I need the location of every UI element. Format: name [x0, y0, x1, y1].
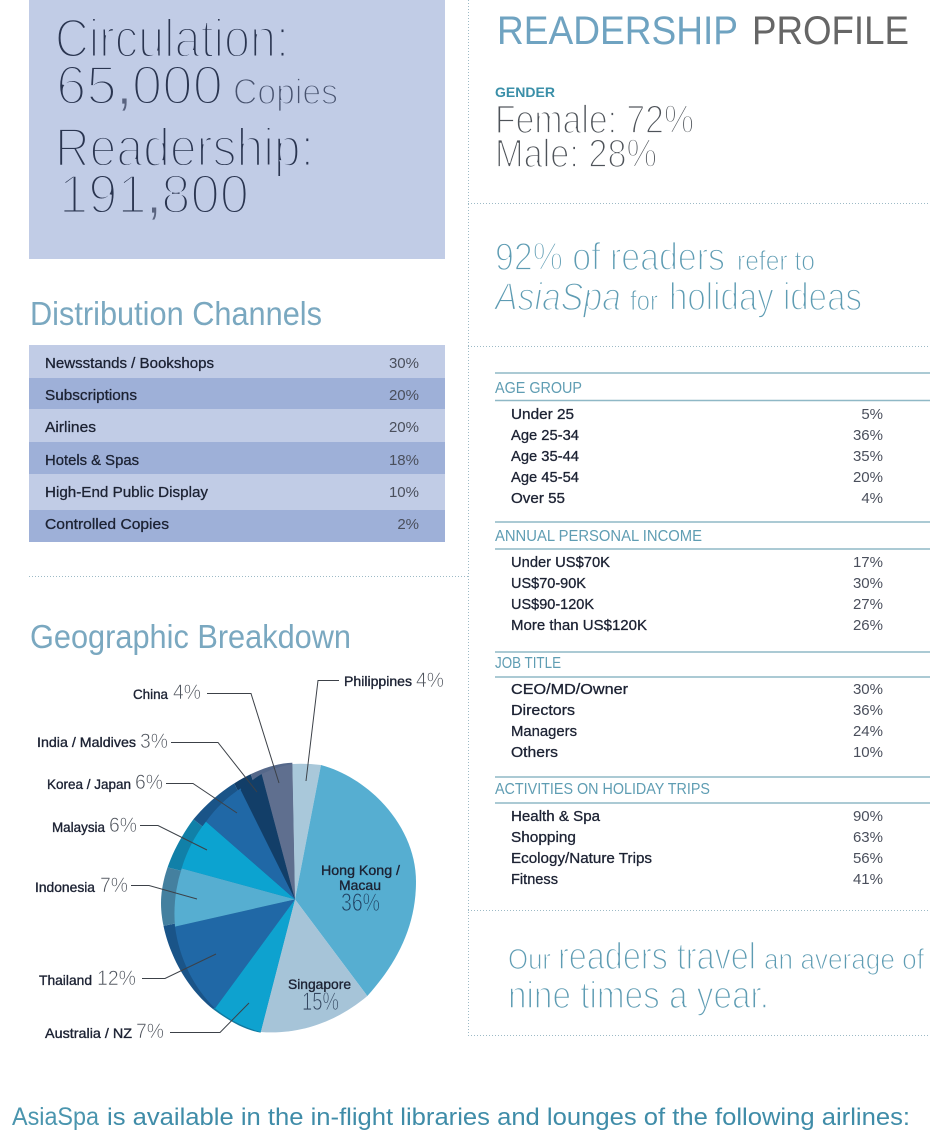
- callout: travel frequency: Our: [508, 944, 551, 976]
- callout: Malaysia: 6%: [109, 814, 137, 837]
- table: annual personal income: 30%: [853, 575, 883, 592]
- callout: China: China: [133, 686, 168, 702]
- table: age group: 36%: [853, 427, 883, 444]
- block: gender: [495, 84, 694, 176]
- heading: readership profile: PROFILE: [752, 9, 909, 53]
- callout: holiday ideas: holiday ideas: [669, 276, 862, 319]
- table: annual personal income: 17%: [853, 554, 883, 571]
- table: activities on holiday trips: [495, 777, 930, 888]
- label: Singapore: 15%: [302, 988, 339, 1016]
- text: readership number: 191,800: [59, 163, 249, 225]
- pie chart: geographic breakdown: [161, 762, 416, 1032]
- callout: Korea / Japan: 6%: [135, 771, 163, 794]
- table: age group: Under 25: [511, 406, 574, 423]
- callout: India / Maldives: India / Maldives: [37, 734, 136, 750]
- footer: airlines statement: is available in the in-flight libraries and lounges of the following airlines:: [107, 1104, 910, 1131]
- table: activities on holiday trips: Fitness: [511, 871, 558, 888]
- table: annual personal income: US$70-90K: [511, 575, 586, 592]
- table: activities on holiday trips: 90%: [853, 808, 883, 825]
- table: age group: [495, 373, 930, 507]
- table: age group: Age 25-34: [511, 427, 579, 444]
- table: distribution channels: Controlled Copies: [45, 516, 169, 533]
- table: activities on holiday trips: 56%: [853, 850, 883, 867]
- callout: Malaysia: Malaysia: [52, 819, 105, 835]
- table: age group: Age 35-44: [511, 448, 579, 465]
- label: Singapore: Singapore: [288, 976, 351, 992]
- callout: holiday ideas: refer to: [737, 245, 815, 276]
- callout: China: [133, 681, 279, 783]
- table: age group: Over 55: [511, 490, 565, 507]
- callout: Malaysia: [52, 814, 207, 850]
- table: age group: 35%: [853, 448, 883, 465]
- callout: holiday ideas: [493, 236, 862, 319]
- label: Singapore: [288, 976, 351, 1016]
- callout: India / Maldives: 3%: [140, 730, 168, 753]
- text: readership label: Readership:: [55, 116, 314, 178]
- callout: Australia / NZ: [45, 1003, 249, 1043]
- table: activities on holiday trips: Ecology/Nature Trips: [511, 850, 652, 867]
- table: job title: JOB TITLE: [495, 655, 561, 672]
- table: distribution channels: 18%: [389, 452, 419, 469]
- block: gender: Female: 72%: [495, 98, 694, 142]
- block: gender: Male: 28%: [495, 132, 657, 176]
- table: distribution channels: [29, 345, 445, 542]
- table: job title: 24%: [853, 723, 883, 740]
- callout: holiday ideas: AsiaSpa: [493, 276, 621, 319]
- table: job title: 36%: [853, 702, 883, 719]
- label: Hong Kong / Macau: Hong Kong /: [321, 862, 400, 878]
- table: age group: AGE GROUP: [495, 380, 582, 397]
- table: distribution channels: 2%: [397, 516, 419, 533]
- table: distribution channels: Newsstands / Bookshops: [45, 355, 214, 372]
- callout: Australia / NZ: 7%: [136, 1020, 164, 1043]
- text: copies: Copies: [233, 71, 338, 112]
- table: annual personal income: ANNUAL PERSONAL INCOME: [495, 528, 702, 545]
- table: distribution channels: 20%: [389, 419, 419, 436]
- footer: airlines statement: AsiaSpa: [12, 1103, 99, 1131]
- table: activities on holiday trips: Shopping: [511, 829, 576, 846]
- table: job title: 30%: [853, 681, 883, 698]
- heading: readership profile: READERSHIP: [497, 9, 738, 53]
- block: gender: GENDER: [495, 84, 555, 100]
- callout: travel frequency: [508, 936, 925, 1017]
- text: circulation number: 65,000: [56, 54, 223, 116]
- table: annual personal income: [495, 522, 930, 634]
- table: activities on holiday trips: 41%: [853, 871, 883, 888]
- callout: Korea / Japan: [47, 771, 237, 813]
- heading: readership profile: [497, 9, 909, 53]
- panel: circulation and readership: [29, 0, 445, 259]
- table: activities on holiday trips: ACTIVITIES ON HOLIDAY TRIPS: [495, 781, 710, 798]
- callout: Thailand: Thailand: [39, 972, 92, 988]
- label: Hong Kong / Macau: Macau: [339, 877, 381, 893]
- callout: holiday ideas: 92% of readers: [495, 236, 725, 279]
- table: annual personal income: 26%: [853, 617, 883, 634]
- callout: Australia / NZ: Australia / NZ: [45, 1025, 132, 1041]
- table: age group: 4%: [861, 490, 883, 507]
- callout: Indonesia: 7%: [100, 874, 128, 897]
- table: distribution channels: Subscriptions: [45, 387, 137, 404]
- table: distribution channels: 10%: [389, 484, 419, 501]
- table: job title: CEO/MD/Owner: [511, 681, 628, 698]
- table: activities on holiday trips: Health & Spa: [511, 808, 601, 825]
- callout: China: 4%: [173, 681, 201, 704]
- table: job title: 10%: [853, 744, 883, 761]
- table: job title: Directors: [511, 702, 575, 719]
- callout: Indonesia: Indonesia: [35, 879, 95, 895]
- table: age group: 20%: [853, 469, 883, 486]
- text: circulation label: Circulation:: [55, 7, 289, 69]
- callout: Philippines: [306, 669, 444, 781]
- table: job title: [495, 652, 930, 761]
- table: job title: Others: [511, 744, 558, 761]
- table: distribution channels: 20%: [389, 387, 419, 404]
- callout: Philippines: Philippines: [344, 673, 412, 689]
- callout: Korea / Japan: Korea / Japan: [47, 776, 131, 792]
- callout: Thailand: [39, 954, 216, 990]
- callout: Philippines: 4%: [416, 669, 444, 692]
- table: distribution channels: Hotels & Spas: [45, 452, 139, 469]
- table: distribution channels: 30%: [389, 355, 419, 372]
- callout: holiday ideas: for: [630, 285, 658, 316]
- table: age group: 5%: [861, 406, 883, 423]
- heading: distribution channels: Distribution Channels: [30, 295, 322, 332]
- table: age group: Age 45-54: [511, 469, 579, 486]
- callout: Thailand: 12%: [97, 967, 136, 990]
- callout: travel frequency: readers travel: [558, 936, 756, 978]
- table: distribution channels: High-End Public Display: [45, 484, 209, 501]
- label: Hong Kong / Macau: [321, 862, 400, 917]
- label: Hong Kong / Macau: 36%: [341, 889, 380, 917]
- table: annual personal income: US$90-120K: [511, 596, 594, 613]
- table: distribution channels: Airlines: [45, 419, 96, 436]
- table: job title: Managers: [511, 723, 577, 740]
- table: activities on holiday trips: 63%: [853, 829, 883, 846]
- table: annual personal income: More than US$120K: [511, 617, 647, 634]
- heading: geographic breakdown: Geographic Breakdown: [30, 618, 351, 655]
- callout: travel frequency: nine times a year.: [508, 975, 769, 1017]
- callout: India / Maldives: [37, 730, 257, 792]
- table: annual personal income: 27%: [853, 596, 883, 613]
- callout: Indonesia: [35, 874, 197, 899]
- table: annual personal income: Under US$70K: [511, 554, 610, 571]
